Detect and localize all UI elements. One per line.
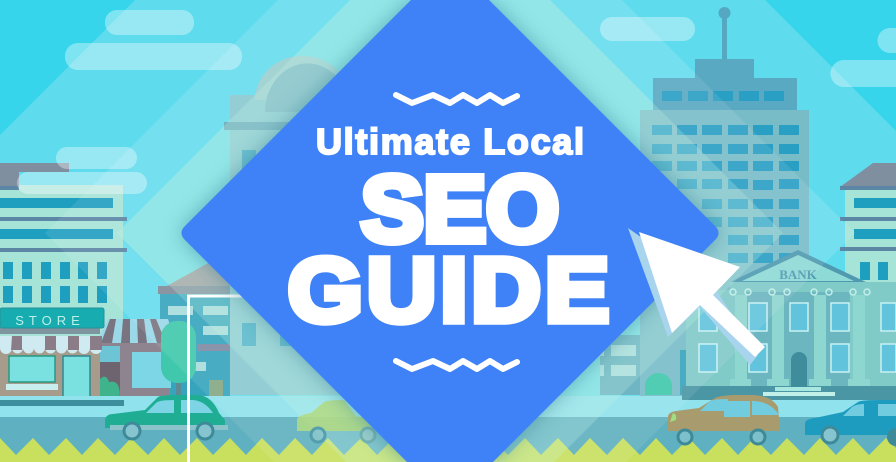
tower xyxy=(600,7,809,400)
top squiggle xyxy=(396,95,517,103)
tan van xyxy=(668,395,780,444)
grass xyxy=(0,438,896,462)
store front xyxy=(0,308,104,398)
main diamond shadow xyxy=(182,0,718,462)
small round tree xyxy=(645,373,672,395)
store sign: STORE xyxy=(15,313,85,328)
title line: SEO: SEO xyxy=(361,157,559,261)
teal building with roof xyxy=(158,262,230,396)
yellow car xyxy=(297,400,380,442)
right office building xyxy=(840,163,896,297)
green tree xyxy=(161,321,196,399)
shrub xyxy=(100,377,120,398)
bottom squiggle xyxy=(396,361,517,369)
white frame line xyxy=(188,296,250,462)
green car xyxy=(105,395,228,439)
clouds xyxy=(17,10,896,194)
bank xyxy=(682,250,896,400)
title line: GUIDE: GUIDE xyxy=(288,240,609,340)
sidewalk and road xyxy=(0,396,896,462)
blue car xyxy=(805,400,896,446)
title line: Ultimate Local: Ultimate Local xyxy=(316,121,584,162)
striped awning shop xyxy=(96,319,176,396)
bank label: BANK xyxy=(779,267,818,282)
main blue diamond xyxy=(182,0,718,462)
left store building xyxy=(0,163,127,400)
domed building xyxy=(224,56,350,395)
icon: cursor arrow xyxy=(628,228,765,365)
